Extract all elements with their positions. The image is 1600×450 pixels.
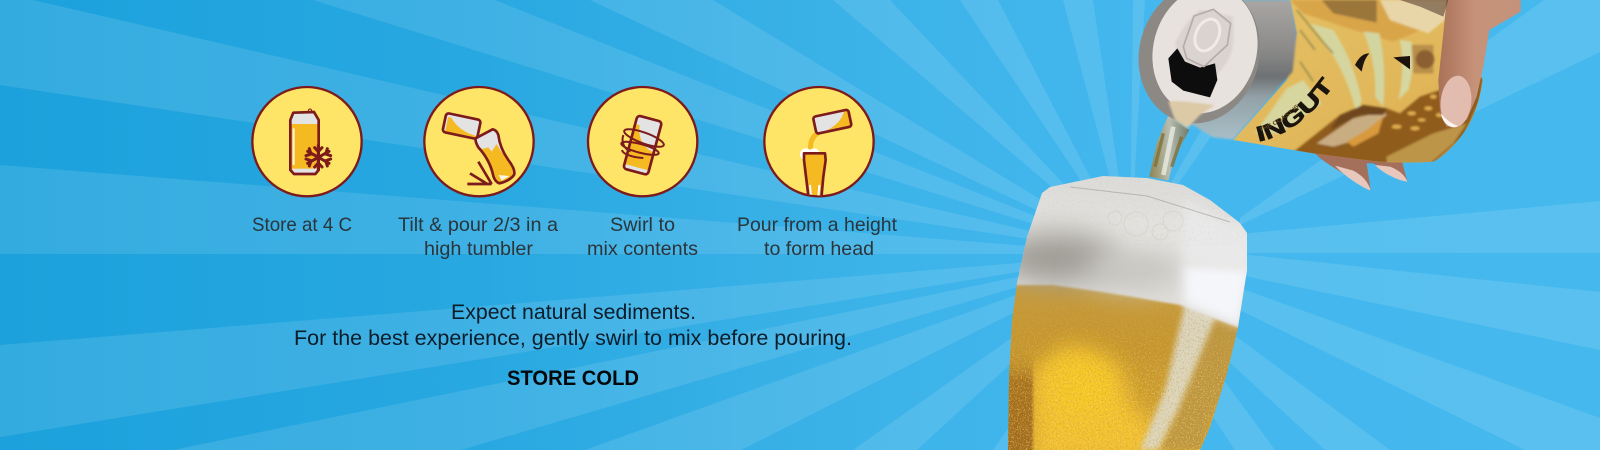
icon: tilt and pour	[424, 87, 534, 196]
can neck	[1190, 0, 1297, 139]
can small print: THE COAST IS	[1258, 104, 1298, 131]
fingernail	[1438, 74, 1474, 129]
icon: swirl to mix	[588, 87, 697, 196]
captions: step labels: Store at 4 C	[252, 214, 352, 236]
beer glass	[1008, 176, 1247, 450]
icon: pour from a height	[764, 87, 874, 198]
captions: step labels: Swirl to	[610, 214, 675, 236]
note: natural sediments: For the best experience, gently swirl to mix before pouring.	[294, 327, 852, 350]
captions: step labels: Pour from a height	[737, 214, 898, 236]
captions: step labels: Tilt & pour 2/3 in a	[398, 214, 558, 236]
captions: step labels: mix contents	[587, 238, 698, 260]
beer stream	[1149, 115, 1189, 181]
beer body	[1000, 280, 1250, 450]
pull tab	[1183, 9, 1231, 67]
captions: step labels: to form head	[764, 238, 874, 260]
note: natural sediments	[294, 301, 852, 350]
captions: step labels	[252, 214, 898, 260]
can wordmark: INGUT	[1256, 76, 1330, 142]
foam head	[1016, 176, 1247, 332]
icon: store at 4 C	[252, 87, 362, 196]
opening	[1168, 48, 1217, 97]
heading: store cold: STORE COLD	[507, 366, 639, 390]
note: natural sediments: Expect natural sediments.	[451, 301, 696, 324]
beer can	[1138, 0, 1483, 163]
hand holding the can	[1400, 0, 1521, 129]
can rim	[1123, 0, 1276, 137]
captions: step labels: high tumbler	[424, 238, 534, 260]
can label	[1234, 0, 1483, 163]
fingers under the can	[1313, 152, 1407, 191]
foam at spout	[1168, 101, 1215, 128]
can lid	[1139, 0, 1271, 125]
